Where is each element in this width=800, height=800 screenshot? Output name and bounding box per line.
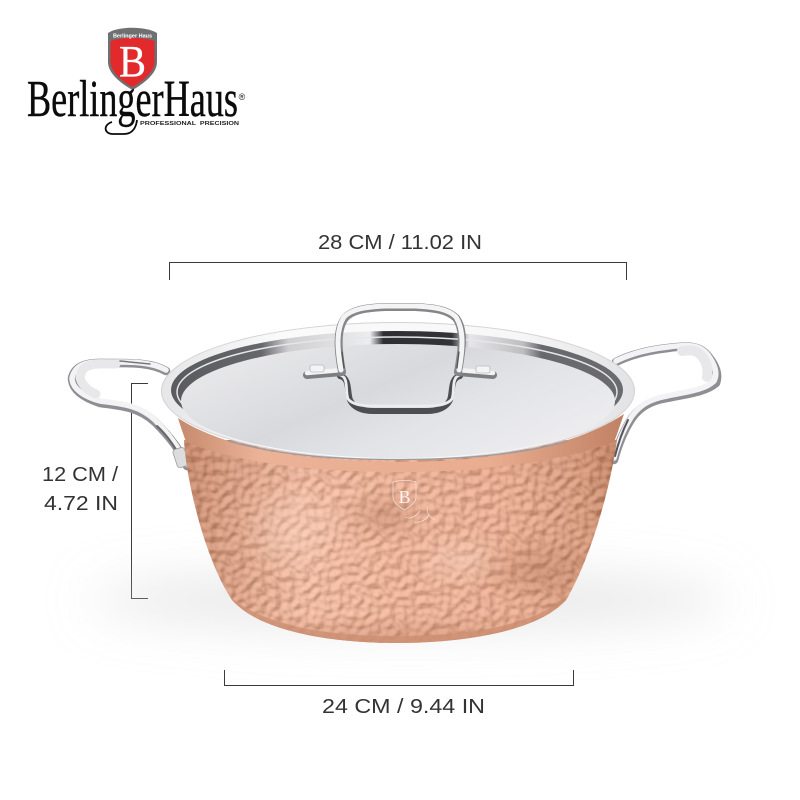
- handle lower loop: [340, 376, 460, 411]
- wordmark: BerlingerHaus: [27, 71, 238, 128]
- right handle: [614, 346, 717, 460]
- lid inner ring: [171, 331, 623, 449]
- tagline: PROFESSIONAL PRECISION: [140, 121, 239, 127]
- copper rim band: [178, 414, 624, 472]
- pot body: [180, 430, 622, 646]
- dimension: height 12 cm: [42, 384, 148, 598]
- engraved pot logo: B: [398, 487, 411, 507]
- pot shadow: [90, 570, 730, 630]
- base edge: [230, 594, 570, 643]
- registered mark: ®: [239, 92, 246, 102]
- lid outer rim: [161, 322, 635, 460]
- lid bottom edge: [228, 441, 568, 460]
- dimension: base 24 cm: [224, 670, 574, 718]
- dimension: height 12 cm: 4.72 IN: [44, 493, 118, 515]
- icon: red shield: [108, 28, 157, 90]
- handle rivets: [310, 365, 324, 372]
- left handle: [72, 361, 189, 468]
- handle upper loop: [339, 307, 462, 372]
- product: copper pot: [72, 306, 730, 646]
- engraved pot logo: [393, 480, 435, 522]
- dimension: width 28 cm: 28 CM / 11.02 IN: [318, 232, 482, 254]
- dimension: width 28 cm: [170, 232, 626, 280]
- lid handle: [307, 306, 493, 411]
- brand logo: [27, 28, 246, 134]
- handle feet: [307, 372, 493, 375]
- icon: red shield: Berlinger Haus: [113, 34, 152, 40]
- dimension: height 12 cm: 12 CM /: [42, 464, 118, 486]
- lid dome: [181, 344, 615, 458]
- dimension: base 24 cm: 24 CM / 9.44 IN: [322, 696, 485, 718]
- icon: red shield: B: [119, 37, 146, 86]
- wordmark swash: [106, 120, 137, 134]
